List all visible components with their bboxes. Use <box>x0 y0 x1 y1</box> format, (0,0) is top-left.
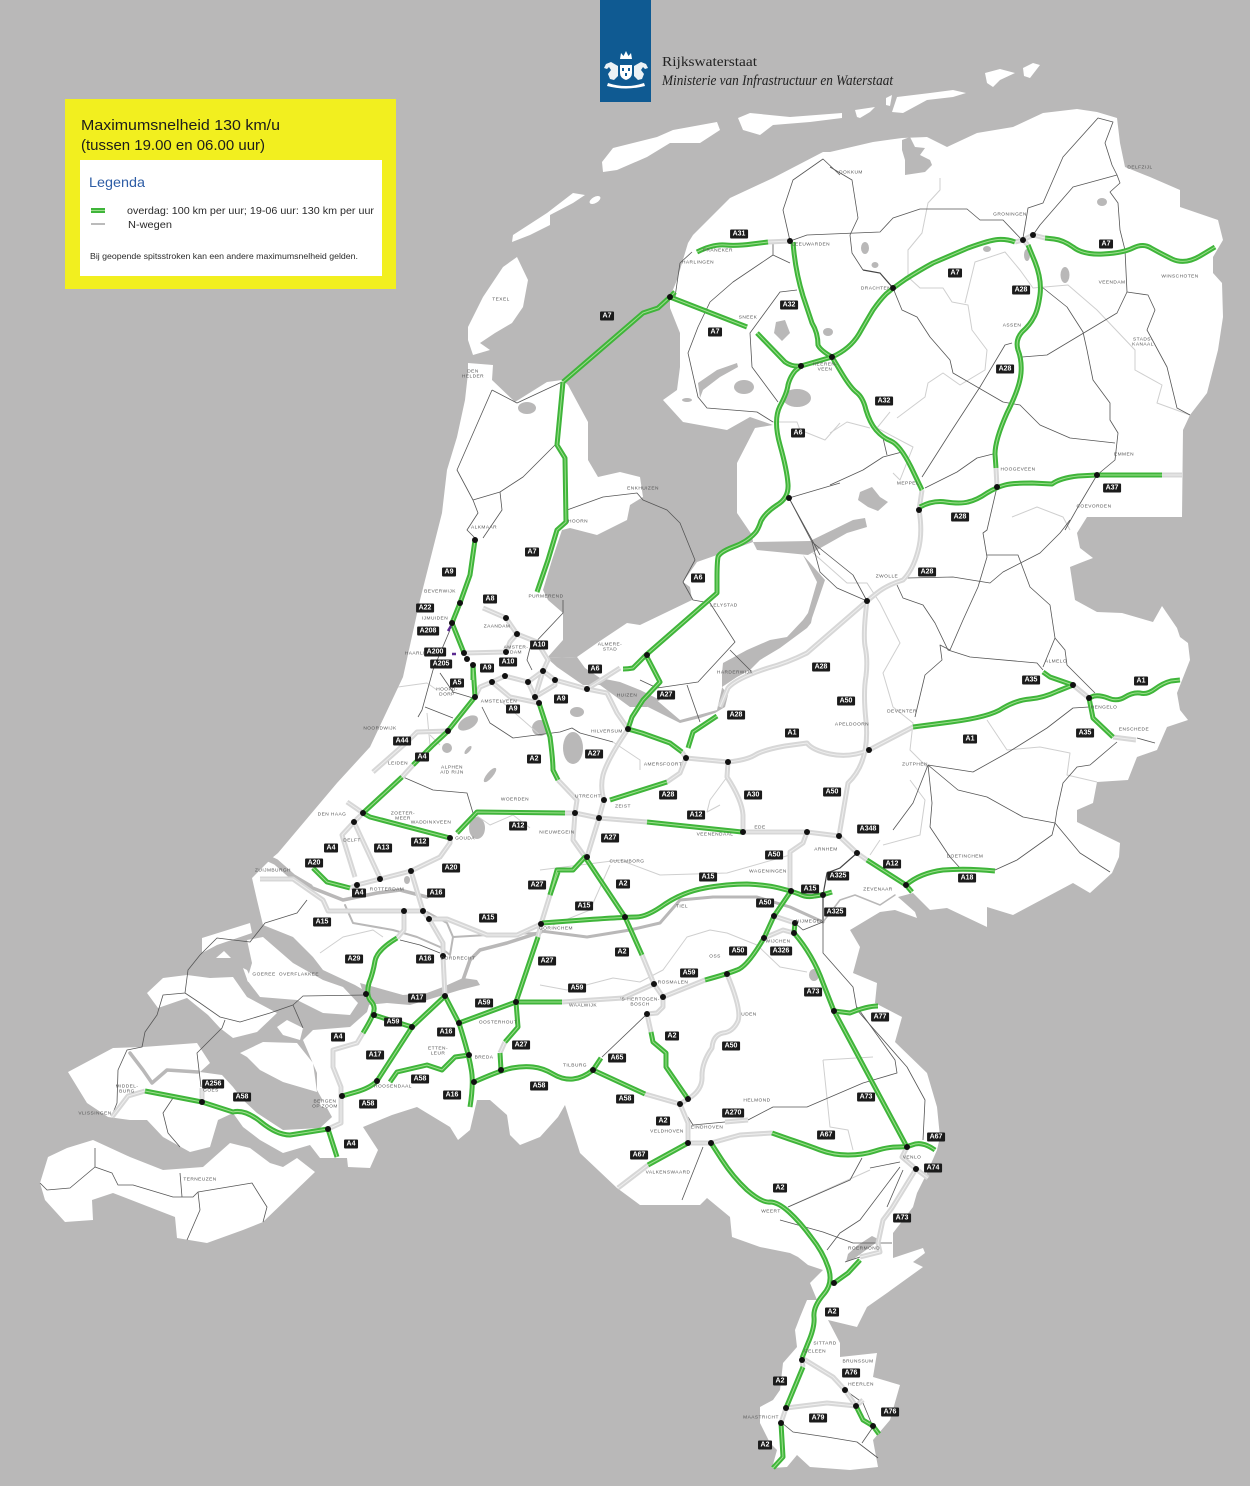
road number badges: A67 <box>820 1132 832 1138</box>
city labels: ENKHUIZEN <box>627 486 659 491</box>
city labels: HOOGEVEEN <box>1001 467 1035 472</box>
road number badges: A2 <box>530 756 538 762</box>
grey motorways <box>112 235 1182 1423</box>
road number badges: A28 <box>921 568 933 576</box>
road number badges: A12 <box>690 812 702 818</box>
road number badges: A4 <box>418 754 426 760</box>
road number badges: A59 <box>683 970 695 976</box>
city labels: LEEUWARDEN <box>792 242 830 247</box>
city labels: OVERFLAKKEE <box>279 972 319 977</box>
city labels: HARDERWIJK <box>717 670 753 675</box>
junction dots <box>199 232 1100 1429</box>
city labels: HEERLEN <box>848 1382 874 1387</box>
city labels: IJMUIDEN <box>422 616 448 621</box>
road number badges: A28 <box>954 514 966 520</box>
road number badges: A2 <box>828 1308 836 1316</box>
road number badges: A58 <box>619 1096 631 1102</box>
city labels: DEVENTER <box>887 709 917 714</box>
road number badges: A27 <box>660 692 672 698</box>
road number badges: A16 <box>446 1092 458 1098</box>
city labels: ROERMOND <box>848 1246 880 1251</box>
road number badges: A27 <box>515 1042 527 1048</box>
road number badges: A200 <box>427 648 443 656</box>
city labels: ZWOLLE <box>876 574 898 579</box>
road number badges: A18 <box>961 874 973 882</box>
city labels: WAGENINGEN <box>749 869 787 874</box>
road number badges: A4 <box>334 1034 342 1040</box>
road number badges: A9 <box>483 664 491 672</box>
road number badges: A37 <box>1106 484 1118 492</box>
city labels: KANAAL <box>1132 343 1154 348</box>
road number badges: A20 <box>308 860 320 866</box>
road number badges: A2 <box>659 1118 667 1124</box>
road number badges: A6 <box>694 574 702 582</box>
road number badges: A50 <box>732 948 744 954</box>
city labels: FRANEKER <box>703 248 733 253</box>
road number badges: A15 <box>482 914 494 922</box>
city labels: GRONINGEN <box>993 212 1027 217</box>
road number badges: A12 <box>512 822 524 830</box>
road number badges: A348 <box>860 826 876 832</box>
city labels: DEN <box>467 370 479 375</box>
road number badges: A50 <box>840 698 852 704</box>
city labels: WEERT <box>761 1209 781 1214</box>
road number badges: A27 <box>531 882 543 888</box>
road number badges: A67 <box>930 1134 942 1140</box>
legend key: green road: overdag: 100 km per uur; 19-06 uur: 130 km per uur <box>127 205 375 217</box>
city labels: WAALWIJK <box>569 1003 597 1008</box>
city labels: HOORN <box>568 519 588 524</box>
city labels: VEENENDAAL <box>697 832 733 837</box>
road number badges: A58 <box>236 1094 248 1100</box>
road number badges: A16 <box>430 890 442 896</box>
road number badges: A73 <box>896 1214 908 1222</box>
city labels: ALPHEN <box>441 766 463 771</box>
green motorways 130 km/u <box>145 238 1215 1468</box>
road number badges: A10 <box>502 658 514 666</box>
header logo and legend <box>65 0 894 289</box>
city labels: UDEN <box>741 1012 757 1017</box>
city labels: DEN HAAG <box>318 812 346 817</box>
road number badges: A15 <box>702 874 714 880</box>
city labels: NIJMEGEN <box>796 919 824 924</box>
road number badges: A27 <box>588 750 600 758</box>
city labels: DRACHTEN <box>861 286 891 291</box>
city labels: TERNEUZEN <box>183 1177 217 1182</box>
city labels: OP ZOOM <box>312 1105 338 1110</box>
road number badges: A28 <box>815 664 827 670</box>
city labels: WINSCHOTEN <box>1161 274 1199 279</box>
city labels: ROOSENDAAL <box>374 1084 412 1089</box>
road number badges: A4 <box>327 844 335 852</box>
city labels: AMSTELVEEN <box>481 699 517 704</box>
city labels: HUIZEN <box>617 693 637 698</box>
road number badges: A270 <box>725 1110 741 1116</box>
city labels: HILVERSUM <box>591 729 623 734</box>
road number badges: A9 <box>509 706 517 712</box>
legend heading: Legenda <box>89 174 145 190</box>
road number badges: A7 <box>1102 240 1110 248</box>
city labels: DOKKUM <box>839 170 863 175</box>
road number badges: A59 <box>571 984 583 992</box>
road number badges: A65 <box>611 1054 623 1062</box>
road number badges: A8 <box>486 596 494 602</box>
city labels: LEIDEN <box>388 761 408 766</box>
city labels: OOSTERHOUT <box>479 1020 517 1025</box>
city labels: AMERSFOORT <box>644 762 682 767</box>
water bodies <box>320 137 1107 1262</box>
city labels: MAASTRICHT <box>743 1415 779 1420</box>
road number badges: A22 <box>419 604 431 612</box>
road number badges: A67 <box>633 1152 645 1158</box>
city labels: BEVERWIJK <box>424 589 456 594</box>
city labels: VENLO <box>903 1155 921 1160</box>
city labels: VEENDAM <box>1099 280 1125 285</box>
legend key: N-wegen <box>91 219 172 231</box>
city labels: BURG <box>119 1090 135 1095</box>
road number badges: A13 <box>377 844 389 852</box>
city labels: NIEUWEGEIN <box>539 830 575 835</box>
city labels: HAARLEM <box>405 651 431 656</box>
road number badges: A326 <box>773 948 789 954</box>
city labels: MIDDEL- <box>116 1085 138 1090</box>
road number badges: A74 <box>927 1164 939 1172</box>
road number badges: A17 <box>411 994 423 1002</box>
road number badges: A4 <box>347 1140 355 1148</box>
legend title: Maximumsnelheid 130 km/u <box>81 118 280 134</box>
road number badges: A16 <box>440 1028 452 1036</box>
road number badges: A6 <box>794 430 802 436</box>
city labels: TIEL <box>676 904 688 909</box>
road number badges: A27 <box>604 834 616 842</box>
road number badges: A58 <box>533 1082 545 1090</box>
logo text: Ministerie van Infrastructuur en Waterstaat <box>661 73 894 89</box>
land: islands <box>40 63 1040 1243</box>
road number badges: A2 <box>776 1184 784 1192</box>
road number badges: A1 <box>1137 678 1145 684</box>
road number badges: A30 <box>747 792 759 798</box>
road number badges: A205 <box>433 660 449 668</box>
road number badges: A76 <box>884 1408 896 1416</box>
road number badges: A15 <box>578 902 590 910</box>
city labels: ZUIJMBURGH <box>255 868 291 873</box>
city labels: DOETINCHEM <box>947 854 983 859</box>
city labels: CULEMBORG <box>610 859 644 864</box>
logo text: Rijkswaterstaat <box>662 55 757 70</box>
legend title: (tussen 19.00 en 06.00 uur) <box>81 138 265 154</box>
city labels: HELDER <box>462 375 484 380</box>
city labels: EMMEN <box>1114 452 1134 457</box>
city labels: ZEVENAAR <box>863 887 893 892</box>
city labels: ARNHEM <box>814 847 838 852</box>
road number badges: A1 <box>966 736 974 742</box>
city labels: ZOETER- <box>391 812 415 817</box>
city labels: EDE <box>754 825 766 830</box>
road number badges: A73 <box>860 1094 872 1100</box>
road number badges: A50 <box>759 900 771 906</box>
road number badges: A5 <box>453 680 461 686</box>
city labels: WIJCHEN <box>765 939 791 944</box>
road number badges: A77 <box>874 1014 886 1020</box>
city labels: ENSCHEDE <box>1119 727 1149 732</box>
city labels: AMSTER- <box>504 646 528 651</box>
city labels: HOOFD- <box>436 688 458 693</box>
road number badges: A7 <box>711 328 719 336</box>
city labels: VELDHOVEN <box>650 1129 684 1134</box>
road number badges: A17 <box>369 1052 381 1058</box>
road number badges: A2 <box>668 1032 676 1040</box>
road number badges: A50 <box>725 1042 737 1050</box>
road number badges: A2 <box>618 948 626 956</box>
city labels: OSS <box>709 954 721 959</box>
road number badges: A2 <box>761 1442 769 1448</box>
city labels: MEER <box>395 817 411 822</box>
city labels: STAD <box>603 648 617 653</box>
city labels: ETTEN- <box>428 1047 448 1052</box>
city labels: GOUDA <box>455 836 475 841</box>
city labels: PURMEREND <box>529 594 563 599</box>
road number badges: A12 <box>414 838 426 846</box>
road number badges: A16 <box>419 956 431 962</box>
city labels: BERGEN <box>314 1100 336 1105</box>
city labels: DORDRECHT <box>441 956 475 961</box>
city labels: HENGELO <box>1091 705 1117 710</box>
road number badges: A50 <box>826 788 838 796</box>
city labels: ZUTPHEN <box>902 762 928 767</box>
city labels: APELDOORN <box>835 722 869 727</box>
legend panel <box>65 99 396 289</box>
road number badges: A2 <box>776 1378 784 1384</box>
road number badges: A325 <box>827 908 843 916</box>
city labels: SITTARD <box>813 1341 837 1346</box>
road number badges: A35 <box>1025 676 1037 684</box>
city labels: LELYSTAD <box>710 603 738 608</box>
road number badges: A58 <box>362 1100 374 1108</box>
road number badges: A28 <box>662 792 674 798</box>
legend note: Bij geopende spitsstroken kan een andere maximumsnelheid gelden. <box>90 251 358 261</box>
city labels: ZAANDAM <box>484 624 510 629</box>
city labels: SNEEK <box>739 315 757 320</box>
road number badges: A58 <box>414 1076 426 1082</box>
city labels: HEEREN- <box>813 363 837 368</box>
road number badges: A50 <box>768 852 780 858</box>
logo text <box>661 55 894 89</box>
city labels: 'S-HERTOGEN- <box>620 998 660 1003</box>
road number badges: A2 <box>619 880 627 888</box>
city labels: GORINCHEM <box>539 926 573 931</box>
road number badges: A28 <box>730 712 742 718</box>
N325 darker link <box>823 853 857 920</box>
road number badges: A32 <box>783 302 795 308</box>
road number badges: A28 <box>999 366 1011 372</box>
purple short segments <box>448 626 456 654</box>
city labels: WOERDEN <box>501 797 529 802</box>
city labels: HELMOND <box>743 1098 771 1103</box>
city labels: NOORDWIJK <box>363 726 397 731</box>
city labels: BREDA <box>475 1055 493 1060</box>
road number badges: A59 <box>478 1000 490 1006</box>
city labels: VALKENSWAARD <box>646 1170 690 1175</box>
city labels: TILBURG <box>563 1063 587 1068</box>
city labels: ROSMALEN <box>658 980 688 985</box>
city labels: UTRECHT <box>575 794 601 799</box>
legend title <box>81 118 280 154</box>
road number badges: A7 <box>528 548 536 556</box>
city labels: WADDINXVEEN <box>411 820 451 825</box>
road number badges: A9 <box>445 568 453 576</box>
Drachten dark link <box>863 270 893 288</box>
road number badges: A76 <box>845 1370 857 1376</box>
city labels: A/D RIJN <box>440 771 464 776</box>
road number badges: A7 <box>603 312 611 320</box>
city labels: VEEN <box>818 368 832 373</box>
road number badges: A31 <box>733 230 745 238</box>
road number badges: A1 <box>788 730 796 736</box>
road number badges: A325 <box>830 872 846 880</box>
city labels: ROTTERDAM <box>370 887 404 892</box>
legend key: N-wegen: N-wegen <box>128 219 172 231</box>
city labels: EINDHOVEN <box>691 1125 723 1130</box>
city labels: ALMERE- <box>598 643 622 648</box>
icon: crest <box>604 51 648 88</box>
road number badges: A32 <box>878 398 890 404</box>
city labels: DELFZIJL <box>1127 165 1153 170</box>
road number badges: A4 <box>355 890 363 896</box>
city labels: VLISSINGEN <box>78 1111 112 1116</box>
city labels: BRUNSSUM <box>842 1359 874 1364</box>
city labels: BOSCH <box>630 1003 650 1008</box>
city labels: GELEEN <box>804 1349 826 1354</box>
road number badges: A6 <box>591 666 599 672</box>
city labels: GOES <box>203 1088 219 1093</box>
N-wegen light grey lines <box>320 178 1190 1207</box>
city labels: ASSEN <box>1003 323 1021 328</box>
city labels: GOEREE <box>252 972 276 977</box>
city labels: MEPPEL <box>897 481 919 486</box>
city labels: ZEIST <box>615 804 631 809</box>
city labels: HARLINGEN <box>682 260 714 265</box>
road number badges: A79 <box>812 1414 824 1422</box>
road number badges: A20 <box>445 864 457 872</box>
city labels: COEVORDEN <box>1077 504 1111 509</box>
city labels: DAM <box>510 651 522 656</box>
road number badges: A7 <box>951 270 959 276</box>
city labels: ALKMAAR <box>471 525 497 530</box>
road number badges: A59 <box>387 1018 399 1026</box>
road number badges: A15 <box>316 918 328 926</box>
road number badges: A12 <box>886 860 898 868</box>
city labels: TEXEL <box>492 297 510 302</box>
road number badges: A27 <box>541 958 553 964</box>
road number badges: A35 <box>1079 730 1091 736</box>
rivers <box>130 856 895 1083</box>
road number badges: A15 <box>804 886 816 892</box>
city labels: DORP <box>439 693 455 698</box>
road number badges: A28 <box>1015 286 1027 294</box>
road number badges: A208 <box>420 628 436 634</box>
road number badges: A44 <box>396 738 408 744</box>
city labels: DELFT <box>343 838 361 843</box>
city labels: STADS- <box>1133 338 1153 343</box>
road number badges: A10 <box>533 642 545 648</box>
city labels: LEUR <box>431 1052 445 1057</box>
road number badges: A9 <box>557 696 565 702</box>
road number badges: A29 <box>348 956 360 962</box>
city labels: ALMELO <box>1045 659 1067 664</box>
logo blue band <box>600 0 651 102</box>
road number badges: A73 <box>807 988 819 996</box>
road number badges: A256 <box>205 1080 221 1088</box>
